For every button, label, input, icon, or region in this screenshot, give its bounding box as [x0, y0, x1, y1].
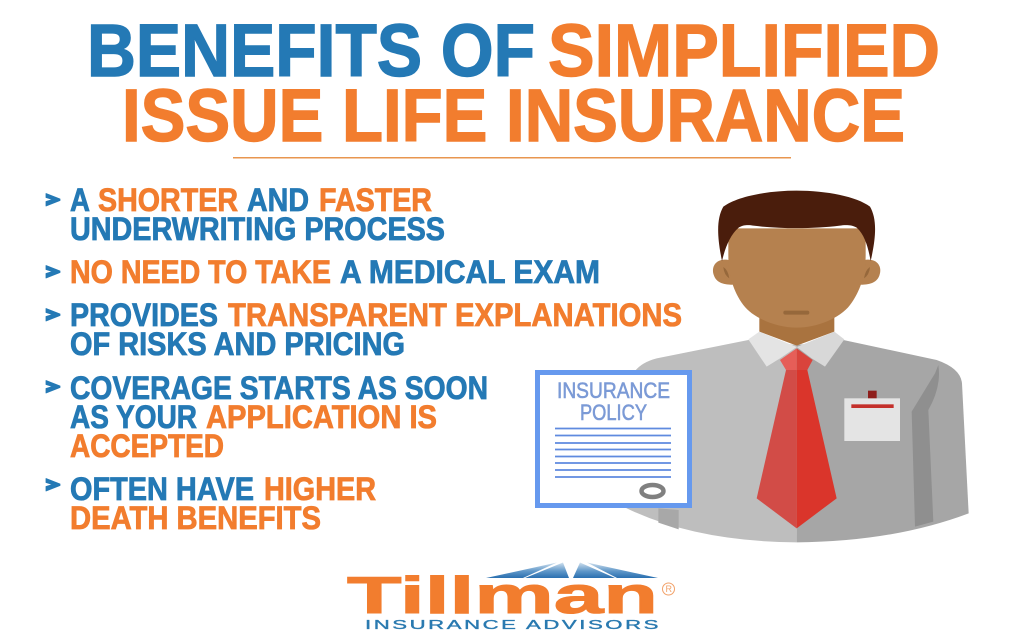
- bullet: transparent explanations: TRANSPARENT EXPLANATIONS: [228, 297, 682, 333]
- icon: insurance policy document: POLICY: [580, 400, 647, 425]
- bullet: coverage starts: [46, 370, 488, 464]
- icon: man in shirt and tie: [623, 191, 969, 542]
- icon: insurance policy document: INSURANCE: [557, 378, 670, 403]
- bullet: coverage starts: COVERAGE STARTS AS SOON: [70, 370, 488, 406]
- bullet: coverage starts: ACCEPTED: [70, 428, 224, 464]
- bullet: no medical exam: NO NEED TO TAKE: [70, 254, 331, 290]
- logo: Tillman Insurance Advisors: INSURANCE ADVISORS: [365, 617, 661, 632]
- title: [87, 9, 940, 157]
- bullet: coverage starts: AS YOUR: [70, 399, 197, 435]
- icon: insurance policy document: [538, 372, 690, 506]
- bullet: no medical exam: A MEDICAL EXAM: [340, 254, 600, 290]
- bullet: coverage starts: APPLICATION IS: [206, 399, 437, 435]
- bullet: transparent explanations: PROVIDES: [70, 297, 218, 333]
- bullet: transparent explanations: [46, 297, 682, 362]
- bullet: higher death benefits: [46, 471, 376, 536]
- logo: Tillman Insurance Advisors: Tillman: [347, 567, 658, 625]
- bullet: transparent explanations: OF RISKS AND PRICING: [70, 326, 405, 362]
- bullet: shorter and faster underwriting: FASTER: [319, 182, 432, 218]
- bullet: shorter and faster underwriting: [46, 182, 445, 247]
- title: ISSUE LIFE INSURANCE: [122, 74, 905, 157]
- title: SIMPLIFIED: [548, 9, 940, 92]
- bullet: no medical exam: [46, 254, 600, 290]
- bullet: shorter and faster underwriting: AND: [247, 182, 309, 218]
- bullet: higher death benefits: HIGHER: [264, 471, 376, 507]
- bullet: shorter and faster underwriting: A: [70, 182, 90, 218]
- bullet: shorter and faster underwriting: UNDERWRITING PROCESS: [70, 211, 445, 247]
- logo: Tillman Insurance Advisors: [347, 562, 674, 632]
- bullet: higher death benefits: OFTEN HAVE: [70, 471, 254, 507]
- logo: Tillman Insurance Advisors: R: [666, 584, 672, 594]
- bullet: shorter and faster underwriting: SHORTER: [98, 182, 238, 218]
- bullet: higher death benefits: DEATH BENEFITS: [70, 500, 321, 536]
- title: BENEFITS OF: [87, 9, 535, 92]
